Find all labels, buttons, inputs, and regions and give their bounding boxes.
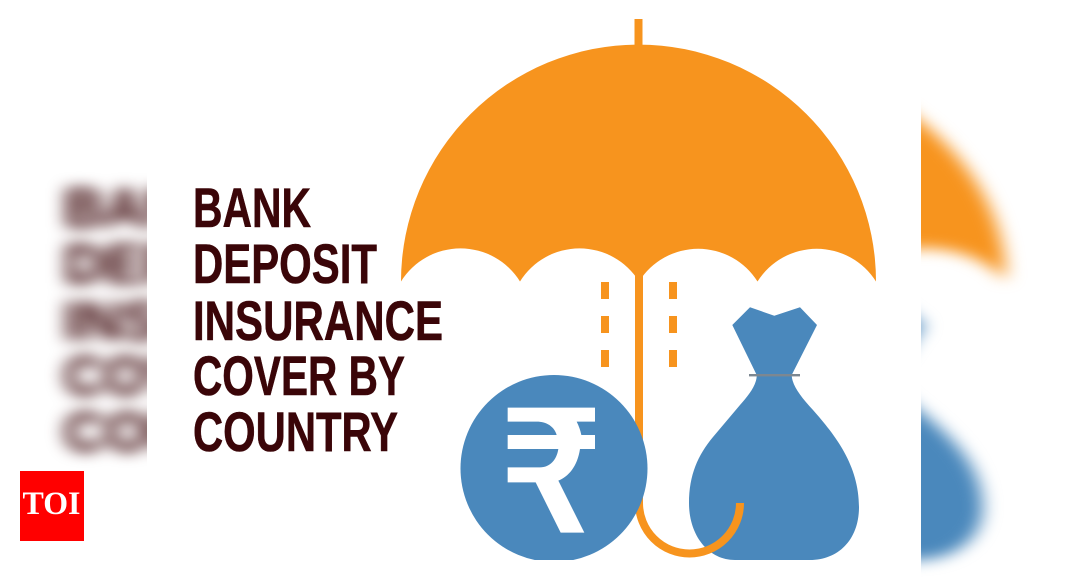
umbrella shaft bbox=[635, 275, 643, 505]
dashes right bbox=[669, 282, 677, 367]
blurred stretched background copy at the sides: INSURANCE bbox=[63, 290, 408, 352]
title: DEPOSIT bbox=[193, 232, 377, 295]
blurred stretched background copy at the sides bbox=[63, 44, 1006, 562]
icon: rupee coin bbox=[460, 375, 648, 562]
TOI logo: TOI bbox=[22, 486, 80, 522]
umbrella handle hook bbox=[639, 503, 740, 554]
TOI logo bbox=[20, 471, 84, 541]
umbrella tip bbox=[634, 19, 642, 45]
title: COVER BY bbox=[193, 344, 405, 407]
blurred stretched background copy at the sides: COVER BY bbox=[63, 345, 356, 407]
icon: money bag bbox=[689, 307, 859, 560]
blurred stretched background copy at the sides: COUNTRY bbox=[63, 401, 346, 463]
title: COUNTRY bbox=[193, 400, 398, 463]
icon: umbrella bbox=[401, 19, 876, 562]
title bbox=[193, 176, 443, 463]
blurred stretched background copy at the sides: DEPOSIT bbox=[63, 233, 317, 295]
umbrella canopy bbox=[401, 45, 876, 281]
title: INSURANCE bbox=[193, 289, 443, 352]
blurred stretched background copy at the sides: BANK bbox=[63, 177, 227, 239]
dashes left bbox=[601, 282, 609, 367]
title: BANK bbox=[193, 176, 311, 239]
